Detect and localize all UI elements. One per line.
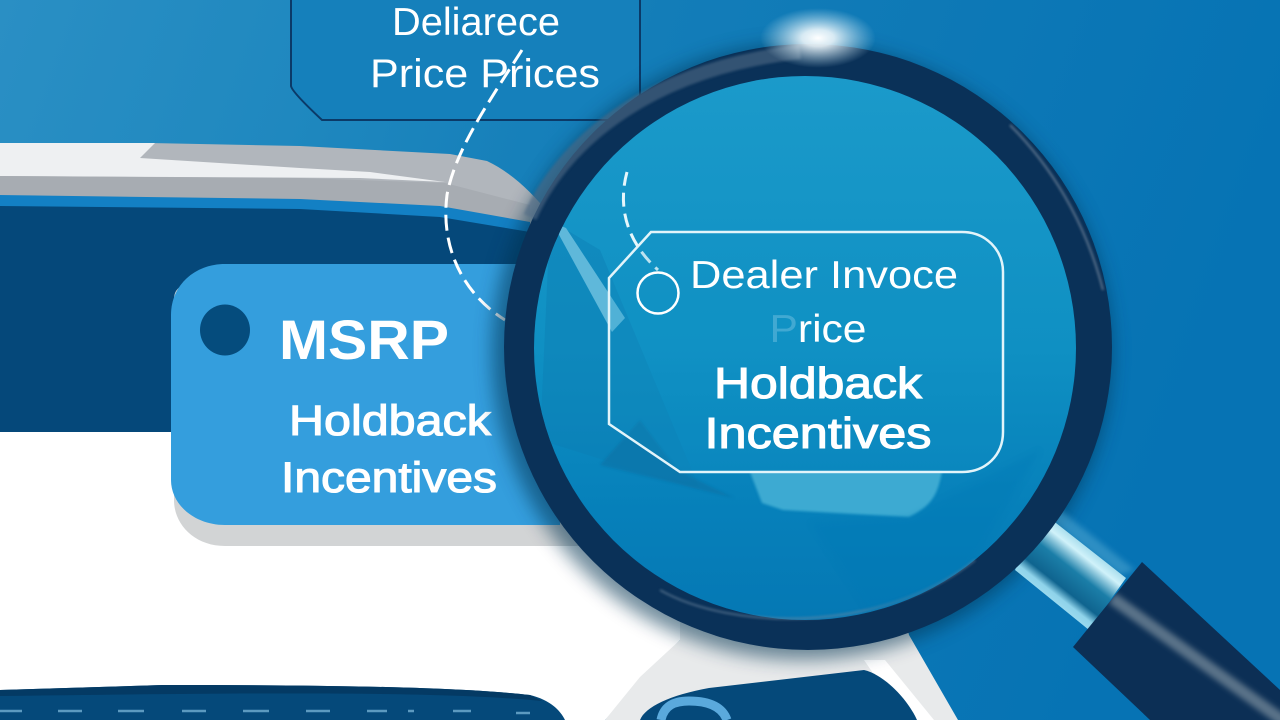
arrow: dashed connector	[446, 50, 522, 320]
icon: glare	[760, 8, 876, 68]
icon: handle ferrule	[1015, 510, 1126, 630]
lens rim	[504, 44, 1112, 650]
dark tag bottom right	[640, 670, 917, 720]
lens contents	[542, 172, 972, 609]
text: Holdback: Holdback	[289, 397, 492, 445]
icon: tag hole outline	[638, 272, 678, 314]
heading: MSRP: MSRP	[279, 308, 449, 371]
panel: document body	[0, 143, 958, 720]
text: Price: Price	[770, 308, 866, 351]
shadow	[492, 44, 1112, 660]
heading: Dealer Invoce: Dealer Invoce	[690, 254, 958, 297]
panel: top price label	[291, 0, 640, 120]
dark lower strip	[0, 685, 565, 720]
icon: tag hole	[200, 304, 250, 356]
panel: dealer invoice tag	[609, 232, 1003, 472]
magnifying glass	[492, 8, 1280, 720]
icon: handle grip	[1073, 562, 1280, 720]
rim highlights	[530, 52, 1103, 619]
icon: handle glow	[1045, 495, 1135, 575]
heading: top label line one: Deliarece	[392, 1, 560, 44]
heading: Holdback: Holdback	[714, 359, 923, 408]
arrow: inner dashed connector	[623, 172, 658, 270]
text: Incentives: Incentives	[281, 454, 497, 502]
heading: Incentives: Incentives	[704, 409, 932, 458]
panel: MSRP tag	[171, 264, 600, 546]
heading: top label line two: Price Prices	[370, 52, 600, 96]
